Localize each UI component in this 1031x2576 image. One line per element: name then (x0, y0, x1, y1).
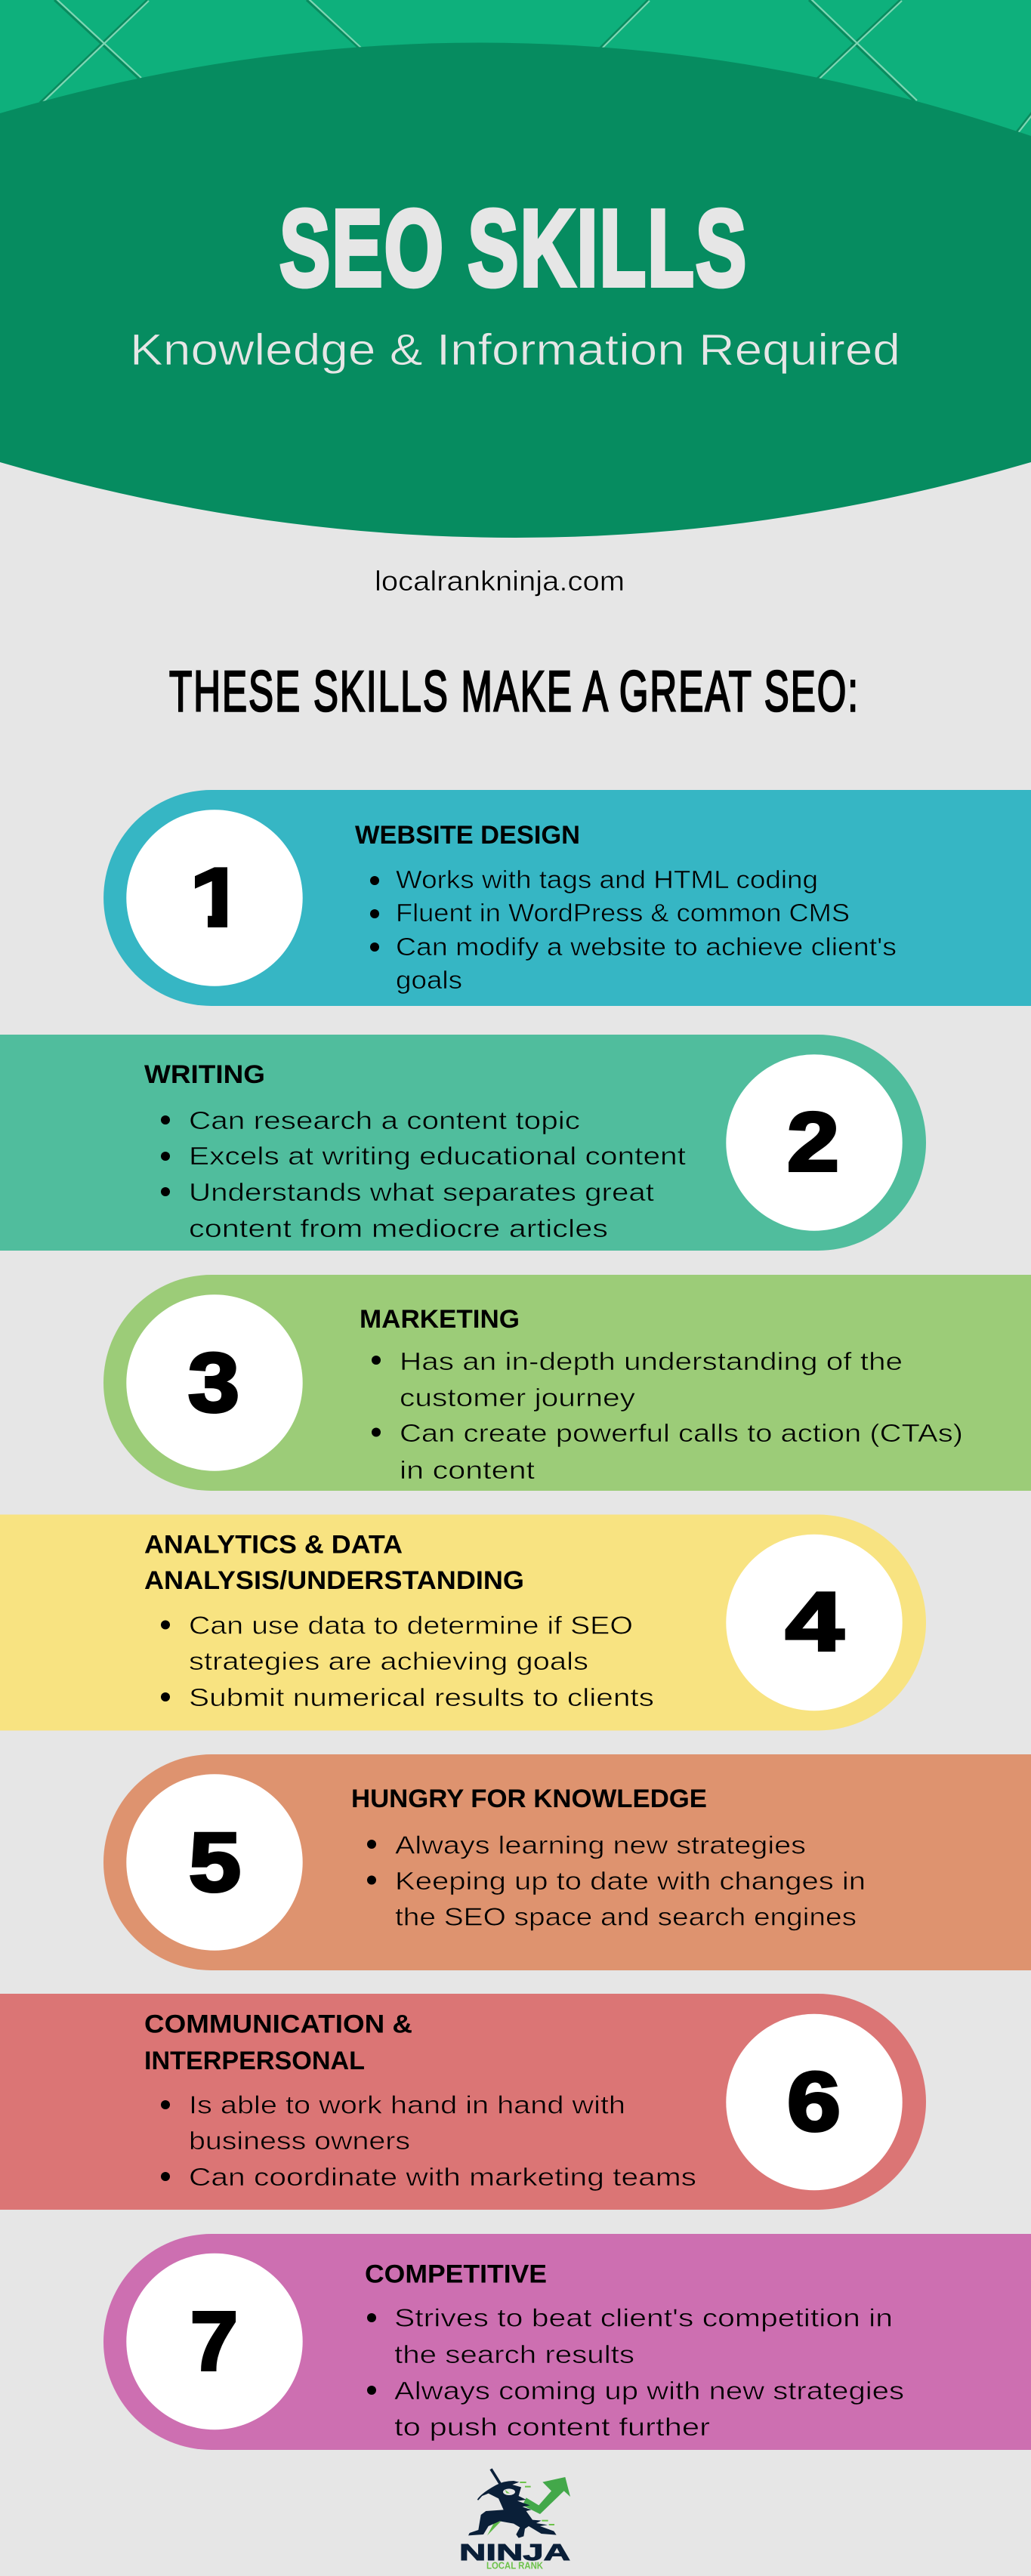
heading: competitive: COMPETITIVE (365, 2260, 547, 2288)
bullet list: Excels at writing educational content (189, 1142, 686, 1170)
number 1: 1 (187, 851, 252, 944)
header background band (0, 0, 1031, 166)
bullet list: Is able to work hand in hand with (189, 2090, 625, 2119)
bullet list: Always coming up with new strategies (394, 2377, 904, 2405)
subtitle: Knowledge & Information Required (130, 325, 900, 375)
number 5: 5 (189, 1816, 241, 1909)
logo: ninja local rank (459, 2469, 570, 2571)
heading: website design: WEBSITE DESIGN (355, 821, 580, 850)
heading: analytics: ANALYSIS/UNDERSTANDING (144, 1566, 524, 1595)
bullet list: Can research a content topic (189, 1106, 580, 1134)
panel: 3 marketing (103, 1275, 1031, 1491)
bullet list (370, 865, 897, 994)
icon: ninja with rising arrow (468, 2469, 570, 2538)
number 6: 6 (787, 2056, 841, 2149)
bullet list: Always learning new strategies (395, 1831, 806, 1859)
bullet list: to push content further (394, 2413, 710, 2441)
bullet list: business owners (189, 2127, 410, 2155)
heading: analytics: ANALYTICS & DATA (144, 1530, 403, 1559)
panel: 2 writing (0, 1035, 926, 1251)
number 2: 2 (787, 1096, 839, 1189)
bullet list: Works with tags and HTML coding (396, 865, 818, 893)
bullet list (161, 2090, 696, 2191)
bullet list: the search results (394, 2340, 634, 2368)
panel: 1 website design (103, 790, 1031, 1006)
heading: marketing: MARKETING (360, 1305, 520, 1334)
bullet list: Can create powerful calls to action (CTAs) (400, 1419, 963, 1447)
bullet list: content from mediocre articles (189, 1214, 608, 1242)
heading: communication: COMMUNICATION & (144, 2010, 412, 2039)
bullet list: Can modify a website to achieve client's (396, 933, 897, 961)
panel: 6 communication (0, 1994, 926, 2210)
panel: 7 competitive (103, 2234, 1031, 2450)
bullet list: Can use data to determine if SEO (189, 1612, 633, 1639)
bullet list (161, 1612, 654, 1711)
number 7: 7 (190, 2295, 238, 2388)
heading: hungry for knowledge: HUNGRY FOR KNOWLEDGE (351, 1785, 707, 1813)
bullet list: the SEO space and search engines (395, 1903, 857, 1930)
number 4: 4 (786, 1575, 844, 1668)
heading: communication (144, 2010, 412, 2075)
bullet list: Strives to beat client's competition in (394, 2303, 893, 2332)
bullet list: Can coordinate with marketing teams (189, 2163, 696, 2191)
bullet list: Fluent in WordPress & common CMS (396, 899, 850, 927)
header dark green ellipse (0, 42, 1031, 538)
logo wordmark: NINJA (459, 2539, 570, 2565)
bullet list: goals (396, 966, 462, 994)
heading: communication: INTERPERSONAL (144, 2047, 365, 2075)
bullet list: Has an in-depth understanding of the (400, 1347, 903, 1375)
website url: localrankninja.com (375, 566, 625, 597)
title: SEO SKILLS (279, 187, 748, 309)
bullet list (367, 2303, 904, 2441)
panel: 5 hungry for knowledge (103, 1754, 1031, 1970)
bullet list (372, 1347, 963, 1484)
bullet list: Submit numerical results to clients (189, 1683, 654, 1711)
logo tagline: LOCAL RANK (486, 2560, 544, 2571)
heading: writing: WRITING (144, 1060, 265, 1089)
bullet list: Understands what separates great (189, 1178, 654, 1206)
bullet list (367, 1831, 866, 1930)
bullet list: customer journey (400, 1384, 636, 1411)
bullet list: Keeping up to date with changes in (395, 1867, 866, 1895)
panel: 4 analytics (0, 1515, 926, 1731)
bullet list: strategies are achieving goals (189, 1647, 588, 1675)
heading: analytics (144, 1530, 524, 1595)
number 3: 3 (188, 1337, 239, 1430)
bullet list (161, 1106, 686, 1242)
bullet list: in content (400, 1456, 535, 1484)
